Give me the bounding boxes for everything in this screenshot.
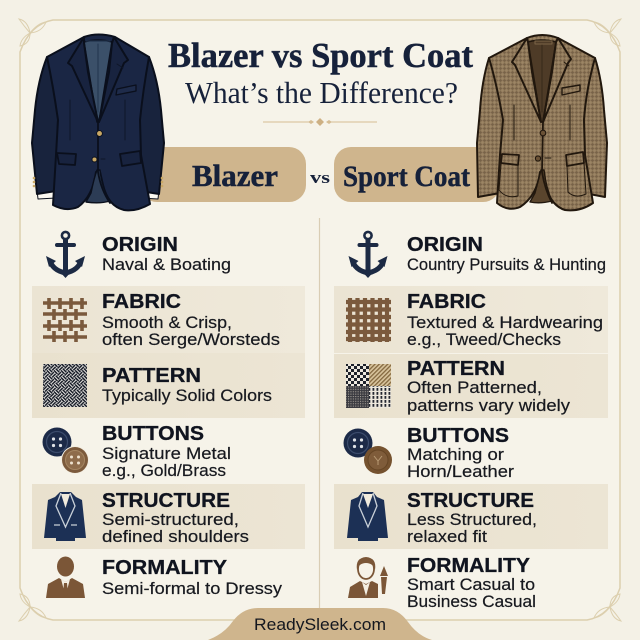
value: Smooth & Crisp, [102,314,232,332]
label: FABRIC [407,290,486,313]
value [407,446,515,481]
footer tab [208,608,432,640]
label: PATTERN [407,357,505,380]
row: buttons [344,424,515,481]
row: structure [347,489,537,546]
value [407,511,537,546]
value [102,314,280,349]
label: FORMALITY [407,554,530,577]
label pill: Blazer: Blazer [192,158,278,193]
value: Often Patterned, [407,379,542,397]
value: Business Casual [407,593,536,611]
value [102,511,249,546]
row: buttons [42,422,231,480]
illustration: navy blazer [32,34,164,210]
label: PATTERN [102,364,201,387]
value: patterns vary widely [407,397,571,415]
icon: buttons [344,428,392,474]
row: formality [348,554,536,611]
icon: smooth weave [43,298,87,342]
icon: jacket [347,492,388,541]
value: Naval & Boating [102,256,231,274]
footer tab: ReadySleek.com [254,616,386,634]
value: e.g., Gold/Brass [102,462,226,480]
value: relaxed fit [407,528,487,546]
label pill: Blazer [140,147,306,202]
value [102,445,231,480]
label: ORIGIN [407,233,483,256]
illustration: brown sport coat [477,35,607,210]
label: ORIGIN [102,233,178,256]
panel: sport coat attributes [344,232,606,611]
value: Semi-structured, [102,511,239,529]
row: fabric [346,290,603,349]
value: e.g., Tweed/Checks [407,331,561,349]
label: FABRIC [102,290,181,313]
title ornament [263,118,377,126]
icon: herringbone swatch [43,364,87,407]
main heading: Blazer vs Sport Coat [168,36,473,75]
value: Country Pursuits & Hunting [407,256,606,274]
label: STRUCTURE [407,489,534,512]
row: fabric [43,290,280,349]
value [407,379,571,415]
value [407,576,536,611]
icon: buttons [42,428,89,474]
panel: blazer attributes [42,232,283,598]
row: pattern [43,364,272,407]
center divider [318,218,320,610]
icon: jacket [44,492,86,541]
value: Smart Casual to [407,576,535,594]
subheading: What’s the Difference? [185,75,458,110]
row bands [32,286,608,549]
label pill: Sport Coat: Sport Coat [343,160,470,193]
value: defined shoulders [102,528,249,546]
row: origin [348,232,606,278]
row: origin [46,232,231,278]
label pill: Sport Coat [334,147,500,202]
icon: textured weave [346,298,391,342]
icon: person in suit [46,556,85,598]
label: BUTTONS [407,424,509,447]
row: pattern [346,357,571,415]
title block [168,36,473,126]
icon: person with torch [348,557,388,598]
label: STRUCTURE [102,489,230,512]
row: formality [46,556,283,598]
label: FORMALITY [102,556,227,579]
row: structure [44,489,249,546]
value: Horn/Leather [407,463,515,481]
value: Semi-formal to Dressy [102,580,283,598]
value: Matching or [407,446,505,464]
value [407,314,603,349]
value: Typically Solid Colors [102,387,272,405]
icon: anchor [46,232,85,278]
value: often Serge/Worsteds [102,331,280,349]
value: Textured & Hardwearing [407,314,603,332]
icon: mixed pattern swatch [346,364,391,408]
value: Signature Metal [102,445,231,463]
label: BUTTONS [102,422,204,445]
vs label: vs [310,168,330,187]
icon: anchor [348,232,388,278]
value: Less Structured, [407,511,537,529]
